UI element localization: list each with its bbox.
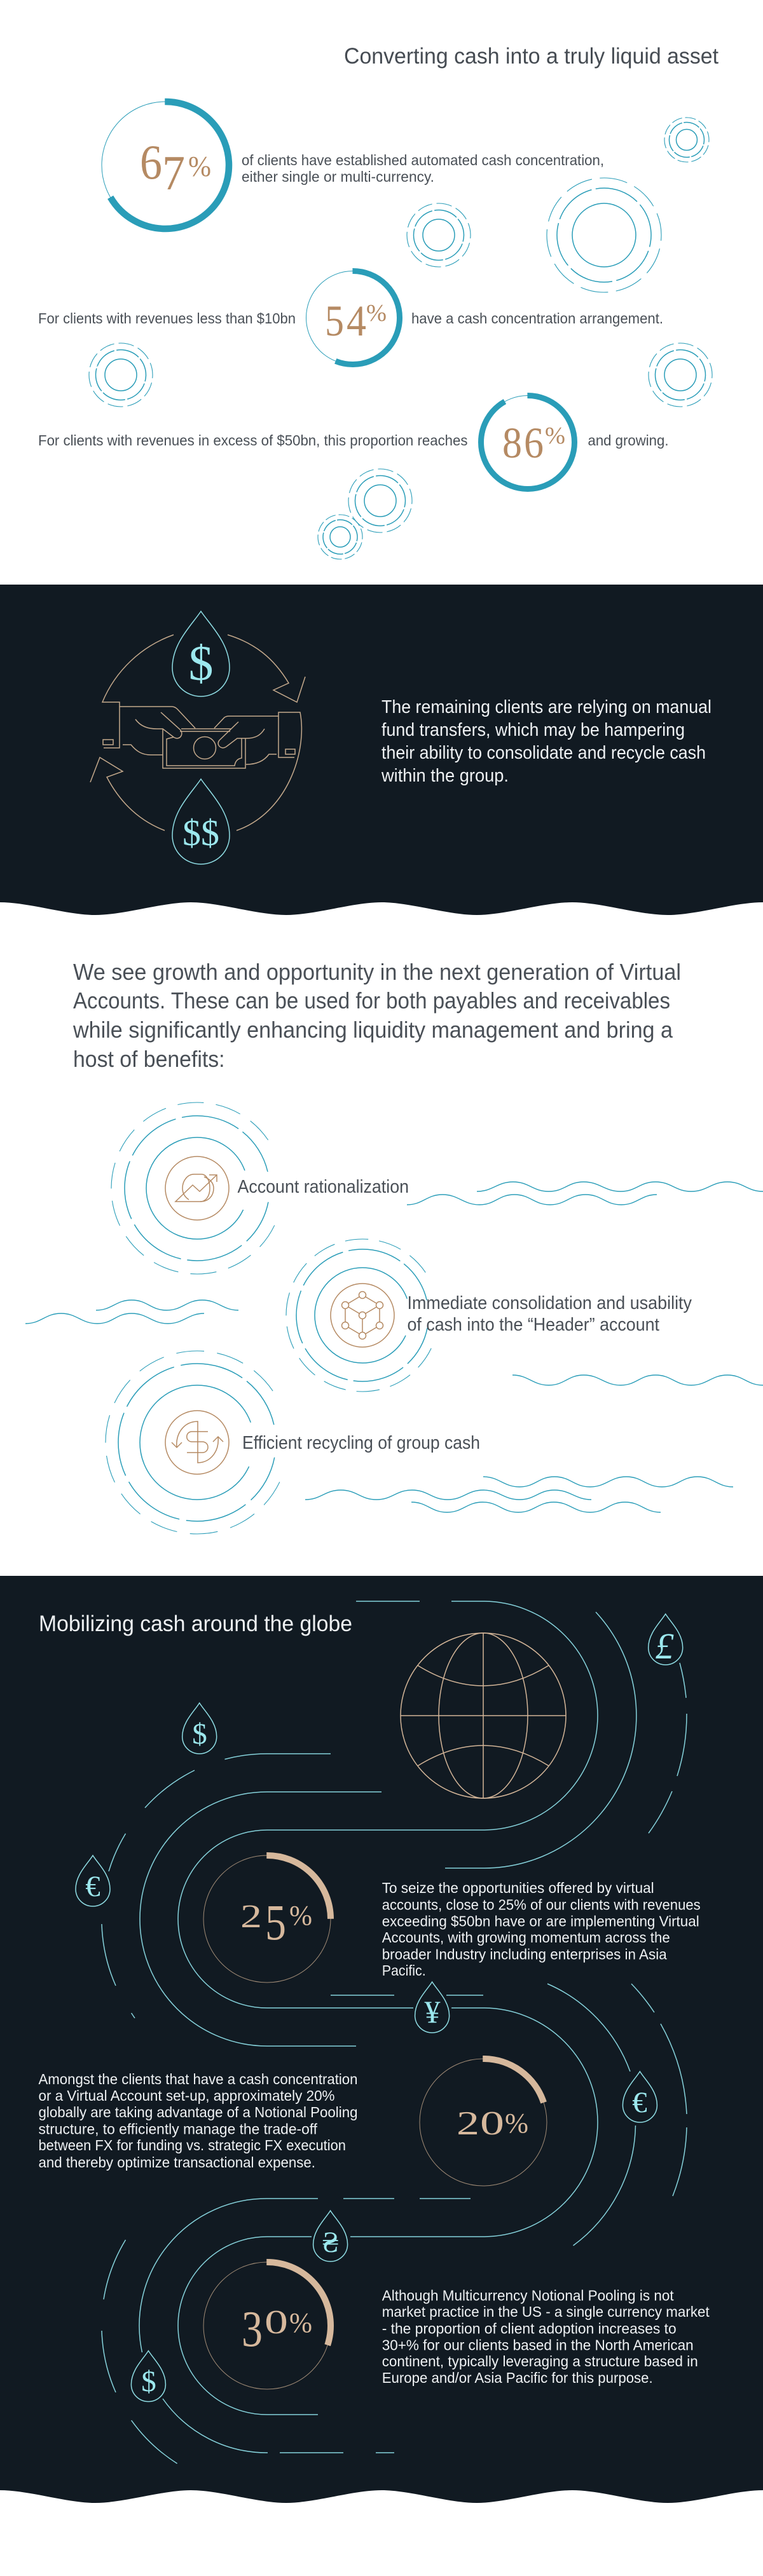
text: virtual accounts adoption: To seize the opportunities offered by virtual xyxy=(382,1880,654,1896)
label: efficient recycling: Efficient recycling of group cash xyxy=(242,1433,480,1453)
text: 67 percent description: of clients have established automated cash concentration, xyxy=(242,152,604,168)
text: notional pooling: between FX for funding vs. strategic FX execution xyxy=(38,2137,346,2153)
text: virtual accounts adoption: exceeding $50bn have or are implementing Virtual xyxy=(382,1913,699,1929)
text: virtual accounts adoption: accounts, close to 25% of our clients with revenues xyxy=(382,1896,701,1913)
text: remaining clients xyxy=(381,697,711,786)
donut stat: 54 percent: 4 xyxy=(347,297,366,345)
text: multicurrency notional pooling: 30+% for our clients based in the North American xyxy=(382,2337,694,2354)
waves: bottom xyxy=(305,1477,733,1512)
text: clients over 50bn: For clients with revenues in excess of $50bn, this proportion reaches xyxy=(38,432,468,449)
donut stat: 30 percent: 0 xyxy=(265,2304,288,2341)
text: multicurrency notional pooling: - the proportion of client adoption increases to xyxy=(382,2320,677,2336)
waves: middle right xyxy=(512,1375,763,1385)
text: remaining clients: within the group. xyxy=(381,766,509,786)
icon: ripple right xyxy=(636,330,725,419)
text: virtual accounts intro: Accounts. These can be used for both payables and receivables xyxy=(73,987,670,1013)
icon: ripple top right xyxy=(656,109,718,171)
icon: euro drop lower xyxy=(622,2071,657,2122)
text: clients under 10bn: For clients with revenues less than $10bn xyxy=(38,310,296,327)
icon: ripple bottom small xyxy=(309,506,371,568)
text: notional pooling: structure, to efficiently manage the trade-off xyxy=(38,2121,317,2138)
icon: ripple centre xyxy=(394,191,483,280)
icon: ripple large xyxy=(523,154,685,316)
text: and growing: and growing. xyxy=(588,432,669,449)
text: cash concentration arrangement: have a cash concentration arrangement. xyxy=(411,310,663,327)
icon: globe xyxy=(401,1633,566,1798)
text: notional pooling xyxy=(38,2071,357,2171)
text: virtual accounts adoption: Accounts, with growing momentum across the xyxy=(382,1929,670,1946)
icon: euro drop: € xyxy=(85,1870,100,1903)
icon: ripple bottom xyxy=(336,456,425,545)
donut stat: 30 percent: 3 xyxy=(242,2301,263,2357)
label: immediate consolidation: of cash into the “Header” account xyxy=(407,1315,659,1335)
icon: drop with double dollar xyxy=(172,779,230,864)
text: virtual accounts intro: We see growth and opportunity in the next generation of Virtual xyxy=(73,959,681,985)
dark wavy background xyxy=(0,1576,763,2503)
donut stat: 25 percent: 2 xyxy=(240,1899,262,1935)
text: notional pooling: globally are taking advantage of a Notional Pooling xyxy=(38,2104,357,2120)
donut stat: 20 percent xyxy=(420,2059,547,2186)
text: virtual accounts adoption: broader Industry including enterprises in Asia xyxy=(382,1946,668,1962)
text: multicurrency notional pooling: market practice in the US - a single currency market xyxy=(382,2303,710,2320)
donut stat: 30 percent: % xyxy=(289,2307,312,2338)
donut stat: 25 percent: 5 xyxy=(265,1895,286,1951)
donut stat: 54 percent xyxy=(306,271,399,365)
donut stat: 25 percent: % xyxy=(289,1900,312,1931)
heading: converting cash: Converting cash into a truly liquid asset xyxy=(344,44,718,69)
panel: converting cash xyxy=(38,44,725,568)
donut stat: 67 percent: 7 xyxy=(162,146,185,200)
donut stat: 20 percent: 0 xyxy=(480,2105,504,2142)
waves: upper right xyxy=(407,1182,763,1205)
icon: drop with single dollar: $ xyxy=(188,635,214,691)
icon: euro drop xyxy=(76,1855,110,1906)
dark wavy background xyxy=(0,585,763,915)
label: immediate consolidation: Immediate consolidation and usability xyxy=(407,1293,692,1313)
text: virtual accounts adoption xyxy=(382,1880,701,1979)
text: notional pooling: or a Virtual Account set-up, approximately 20% xyxy=(38,2087,335,2104)
donut stat: 54 percent: % xyxy=(366,300,387,327)
text: notional pooling: Amongst the clients that have a cash concentration xyxy=(38,2071,357,2087)
donut stat: 67 percent: % xyxy=(188,150,211,182)
panel: virtual accounts benefits xyxy=(25,959,763,1534)
icon: ripple left xyxy=(76,330,165,419)
donut stat: 86 percent: % xyxy=(545,423,565,449)
donut stat: 30 percent xyxy=(203,2262,331,2389)
flow lines xyxy=(102,1601,687,2464)
icon: euro drop lower: € xyxy=(632,2086,647,2119)
icon: yen drop xyxy=(415,1982,450,2033)
text: virtual accounts intro xyxy=(72,959,681,1072)
waves: left xyxy=(25,1300,238,1324)
donut stat: 67 percent: 6 xyxy=(140,135,162,189)
donut stat: 86 percent: 6 xyxy=(524,419,544,467)
panel: mobilizing cash around the globe xyxy=(0,1576,763,2503)
icon: hryvnia drop xyxy=(313,2211,348,2261)
text: notional pooling: and thereby optimize transactional expense. xyxy=(38,2154,315,2171)
text: 67 percent description xyxy=(242,152,604,185)
icon: ripple with network cube xyxy=(286,1239,439,1392)
donut stat: 20 percent: % xyxy=(505,2108,528,2139)
donut stat: 86 percent xyxy=(481,395,575,489)
text: virtual accounts adoption: Pacific. xyxy=(382,1962,426,1979)
text: multicurrency notional pooling xyxy=(382,2288,710,2386)
icon: yen drop: ¥ xyxy=(425,1994,440,2030)
text: 67 percent description: either single or multi-currency. xyxy=(242,168,434,185)
icon: dollar drop lower: $ xyxy=(141,2365,156,2398)
text: multicurrency notional pooling: Europe and/or Asia Pacific for this purpose. xyxy=(382,2369,653,2386)
icon: drop with single dollar xyxy=(172,611,230,696)
donut stat: 54 percent: 5 xyxy=(325,297,344,345)
heading: mobilizing cash: Mobilizing cash around the globe xyxy=(39,1611,352,1636)
donut stat: 25 percent xyxy=(203,1855,331,1983)
panel: manual fund transfers xyxy=(0,585,763,915)
text: virtual accounts intro: while significantly enhancing liquidity management and bring a xyxy=(72,1017,673,1043)
text: remaining clients: fund transfers, which may be hampering xyxy=(382,720,685,740)
text: virtual accounts intro: host of benefits: xyxy=(73,1046,225,1072)
icon: dollar drop: $ xyxy=(192,1718,207,1751)
label: immediate consolidation xyxy=(407,1293,692,1335)
donut stat: 86 percent: 8 xyxy=(502,419,522,467)
text: multicurrency notional pooling: Although Multicurrency Notional Pooling is not xyxy=(382,2288,674,2304)
icon: pound drop xyxy=(649,1614,683,1667)
icon: ripple with recycling dollar xyxy=(106,1351,289,1534)
icon: ripple with growth chart xyxy=(111,1102,283,1274)
icon: dollar drop xyxy=(182,1703,217,1754)
icon: hryvnia drop: ₴ xyxy=(322,2226,339,2259)
text: remaining clients: their ability to consolidate and recycle cash xyxy=(382,743,706,763)
text: remaining clients: The remaining clients are relying on manual xyxy=(382,697,711,717)
icon: drop with double dollar: $$ xyxy=(182,812,219,853)
text: multicurrency notional pooling: continent, typically leveraging a structure based in xyxy=(382,2353,698,2369)
icon: hands exchanging cash in a cycle xyxy=(90,611,305,864)
icon: dollar drop lower xyxy=(131,2351,165,2402)
label: account rationalization: Account rationalization xyxy=(238,1177,409,1197)
donut stat: 20 percent: 2 xyxy=(457,2105,479,2142)
donut stat: 67 percent xyxy=(102,102,229,229)
icon: pound drop: £ xyxy=(655,1625,674,1667)
